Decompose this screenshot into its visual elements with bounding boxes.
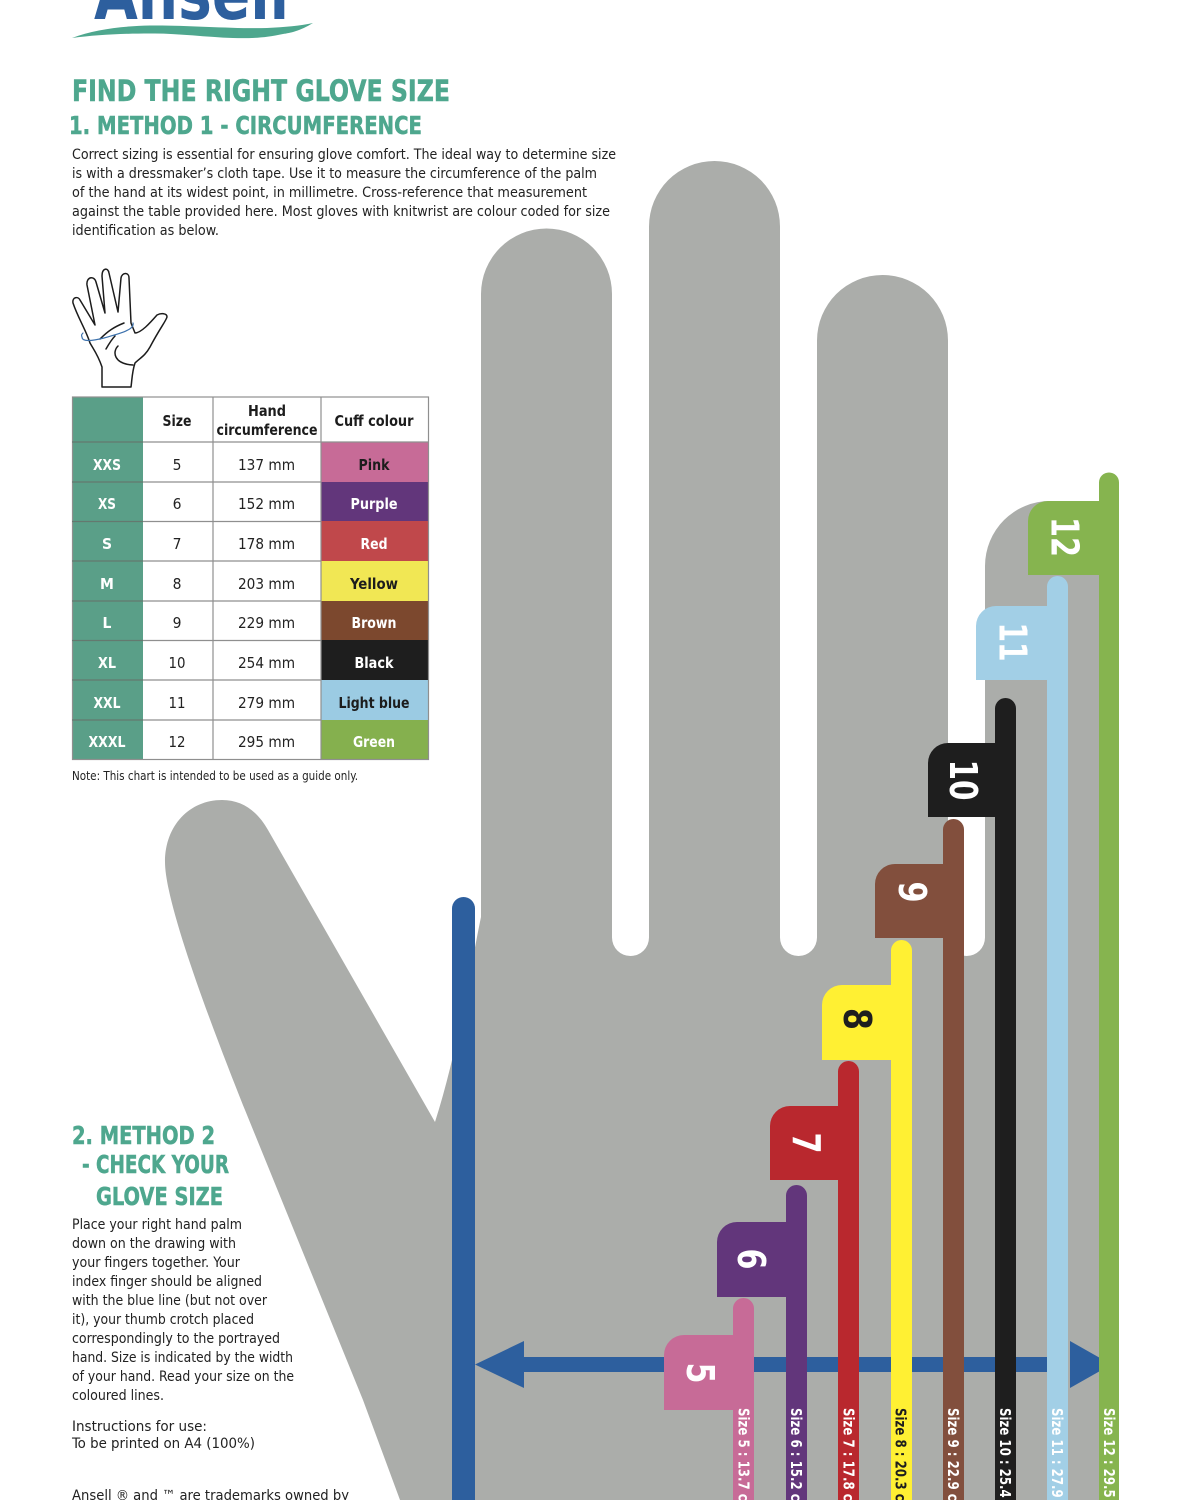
method 1 description: against the table provided here. Most gloves with knitwrist are colour coded for size [72, 204, 610, 220]
size 9 marker [875, 819, 964, 1500]
table rows: XXXL [88, 733, 126, 751]
table rows: Yellow [349, 575, 398, 593]
method 2 description: correspondingly to the portrayed [72, 1331, 280, 1347]
heading: method 2: GLOVE SIZE [96, 1182, 223, 1211]
index finger alignment line [452, 897, 475, 1500]
title: FIND THE RIGHT GLOVE SIZE [72, 74, 450, 108]
flag number 12: 12 [1042, 517, 1086, 557]
table rows: 137 mm [238, 456, 295, 474]
print instructions [71, 1419, 255, 1452]
print instructions: To be printed on A4 (100%) [71, 1436, 255, 1452]
table colour cells [72, 397, 428, 759]
table rows [88, 456, 410, 751]
method 2 description: of your hand. Read your size on the [72, 1369, 294, 1385]
print instructions: Instructions for use: [72, 1419, 207, 1435]
table rows: 11 [168, 694, 186, 712]
table rows: 152 mm [238, 495, 295, 513]
heading: method 1: 1. METHOD 1 - CIRCUMFERENCE [69, 111, 422, 140]
table rows: Black [354, 654, 394, 672]
table rows: 10 [168, 654, 186, 672]
logo swoosh [72, 23, 313, 38]
method 2 description: hand. Size is indicated by the width [72, 1350, 293, 1366]
method 2 description: it), your thumb crotch placed [72, 1312, 254, 1328]
table header: Hand [248, 402, 286, 420]
flag number 11: 11 [990, 622, 1034, 662]
table rows: XXL [94, 694, 121, 712]
method 2 description: your fingers together. Your [72, 1255, 241, 1271]
table rows: M [100, 575, 114, 593]
size 5 marker [664, 1298, 754, 1500]
table header [162, 402, 414, 439]
method 1 description: Correct sizing is essential for ensuring glove comfort. The ideal way to determine size [72, 147, 616, 163]
table rows: Red [360, 535, 388, 553]
size 11 marker [976, 576, 1068, 1500]
table rows: Green [353, 733, 395, 751]
table rows: 178 mm [238, 535, 295, 553]
table rows: Purple [350, 495, 398, 513]
table rows: Light blue [338, 694, 410, 712]
heading: method 2: - CHECK YOUR [82, 1150, 229, 1179]
method 2 description [72, 1217, 294, 1404]
measuring tape loop [82, 323, 133, 340]
table rows: XS [98, 495, 116, 513]
size table [72, 397, 428, 760]
size 8 marker [822, 940, 912, 1500]
method 2 description: Place your right hand palm [72, 1217, 242, 1233]
table rows: 9 [173, 614, 181, 632]
heading: method 2 [72, 1121, 229, 1211]
width arrow [475, 1341, 1100, 1388]
table rows: XXS [93, 456, 121, 474]
flag number 10: 10 [941, 760, 985, 800]
table rows: XL [98, 654, 116, 672]
table header: Cuff colour [334, 412, 414, 430]
method 2 description: coloured lines. [72, 1388, 164, 1404]
icon: hand with measuring tape [73, 269, 167, 387]
flag number 9: 9 [890, 882, 934, 902]
table rows: 8 [173, 575, 181, 593]
method 1 description [72, 147, 616, 239]
table rows: 6 [173, 495, 181, 513]
table header: Size [162, 412, 192, 430]
logo [72, 0, 313, 38]
grey hand silhouette [165, 161, 1099, 1500]
method 1 description: is with a dressmaker’s cloth tape. Use it to measure the circumference of the palm [72, 166, 597, 182]
flag number 8: 8 [835, 1008, 879, 1030]
table rows: 12 [168, 733, 186, 751]
table rows: 279 mm [238, 694, 295, 712]
method 2 description: down on the drawing with [72, 1236, 236, 1252]
method 2 description: index finger should be aligned [72, 1274, 262, 1290]
method 1 description: of the hand at its widest point, in millimetre. Cross-reference that measurement [72, 185, 587, 201]
table rows: S [102, 535, 112, 553]
method 2 description: with the blue line (but not over [72, 1293, 268, 1309]
size 6 marker [717, 1185, 807, 1500]
table rows: 229 mm [238, 614, 295, 632]
table rows: 295 mm [238, 733, 295, 751]
flag number 7: 7 [784, 1132, 828, 1154]
flag number 5: 5 [678, 1362, 722, 1384]
table rows: 254 mm [238, 654, 295, 672]
table header: circumference [216, 421, 318, 439]
table rows: Pink [358, 456, 390, 474]
size 10 marker [928, 698, 1016, 1500]
table rows: 7 [173, 535, 181, 553]
table rows: L [103, 614, 112, 632]
table note: Note: This chart is intended to be used as a guide only. [72, 769, 358, 783]
method 1 description: identification as below. [72, 223, 219, 239]
table rows: Brown [352, 614, 396, 632]
heading: method 2: 2. METHOD 2 [72, 1121, 215, 1150]
flag number 6: 6 [729, 1248, 773, 1270]
table rows: 5 [173, 456, 181, 474]
table rows: 203 mm [238, 575, 295, 593]
size 7 marker [770, 1061, 859, 1500]
size 12 marker [1028, 472, 1119, 1500]
